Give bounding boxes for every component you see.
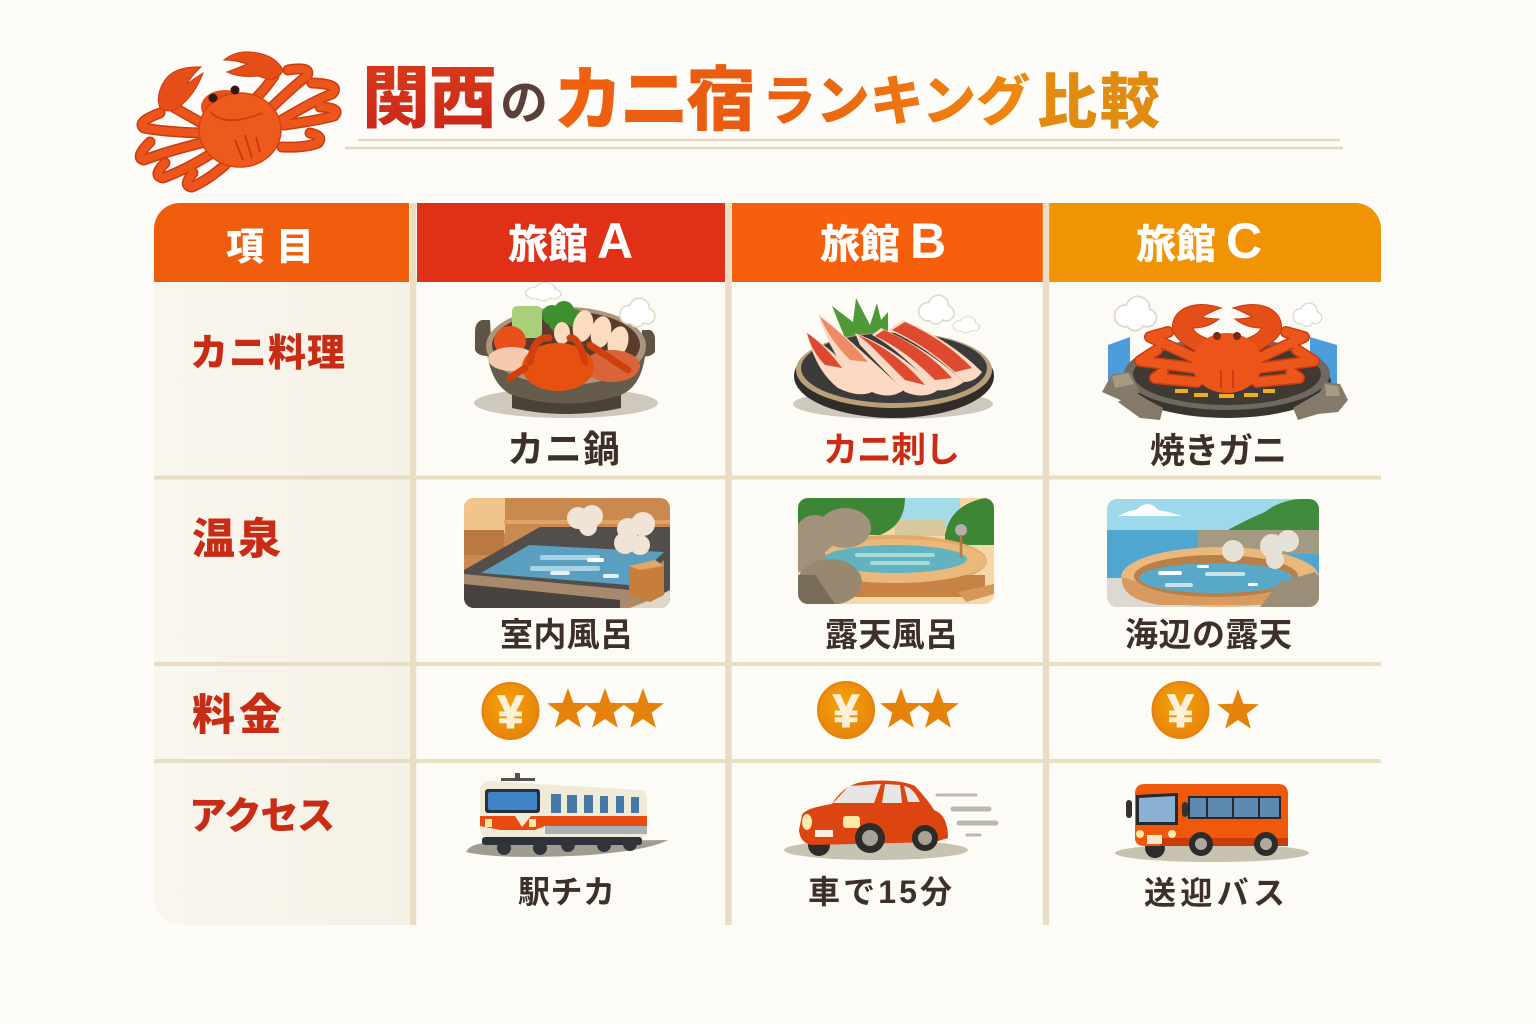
image: open-air bath <box>790 498 994 605</box>
header: ryokan C: C <box>1226 213 1262 269</box>
icon: crab mascot <box>140 52 336 187</box>
rating: price A: ¥ <box>498 686 524 738</box>
title: 比較 <box>1037 69 1160 136</box>
icon: crab hot pot <box>474 282 658 418</box>
header: ryokan A: 旅館 <box>508 223 588 267</box>
header: ryokan B: 旅館 <box>820 223 900 267</box>
icon: car <box>784 781 996 860</box>
rating: price C: ¥ <box>1168 685 1194 737</box>
title: カニ宿 <box>553 61 756 139</box>
rating: price C <box>1152 682 1259 738</box>
icon: train <box>466 773 668 857</box>
icon: grilled crab <box>1102 295 1348 420</box>
text: crab hot pot: カニ鍋 <box>507 429 620 470</box>
text: car: 車で15分 <box>808 874 952 910</box>
title: ランキング <box>762 71 1030 132</box>
row labels column <box>154 282 409 925</box>
row label: access: アクセス <box>189 796 335 838</box>
header: ryokan B <box>732 203 1043 282</box>
text: bus: 送迎バス <box>1144 875 1285 911</box>
header: ryokan C <box>1049 203 1381 282</box>
row label: hot spring: 温泉 <box>192 516 281 564</box>
rating: price B: ¥ <box>833 685 859 737</box>
header: ryokan C: 旅館 <box>1136 223 1216 267</box>
rating: price A <box>482 683 664 739</box>
text: crab sashimi: カニ刺し <box>823 431 960 470</box>
text: seaside bath: 海辺の露天 <box>1125 616 1292 653</box>
rating: price B <box>818 682 959 738</box>
title: の <box>500 77 548 130</box>
panel: comparison table <box>154 203 1381 925</box>
header: item <box>154 203 409 282</box>
header: ryokan A: A <box>597 213 633 269</box>
title: 関西 <box>362 61 497 137</box>
image: seaside bath <box>1107 499 1319 608</box>
text: indoor bath: 室内風呂 <box>500 616 633 653</box>
header: ryokan B: B <box>910 213 946 269</box>
icon: bus <box>1115 784 1309 862</box>
text: grilled crab: 焼きガニ <box>1150 432 1287 471</box>
row label: crab dishes: カニ料理 <box>190 333 345 375</box>
text: train: 駅チカ <box>518 874 615 910</box>
text: open-air bath: 露天風呂 <box>825 616 958 653</box>
image: indoor bath <box>464 498 670 608</box>
header: item: 項目 <box>226 227 314 269</box>
row label: price: 料金 <box>192 692 282 740</box>
header: ryokan A <box>417 203 725 282</box>
icon: crab sashimi <box>793 294 994 419</box>
title <box>362 61 1160 139</box>
